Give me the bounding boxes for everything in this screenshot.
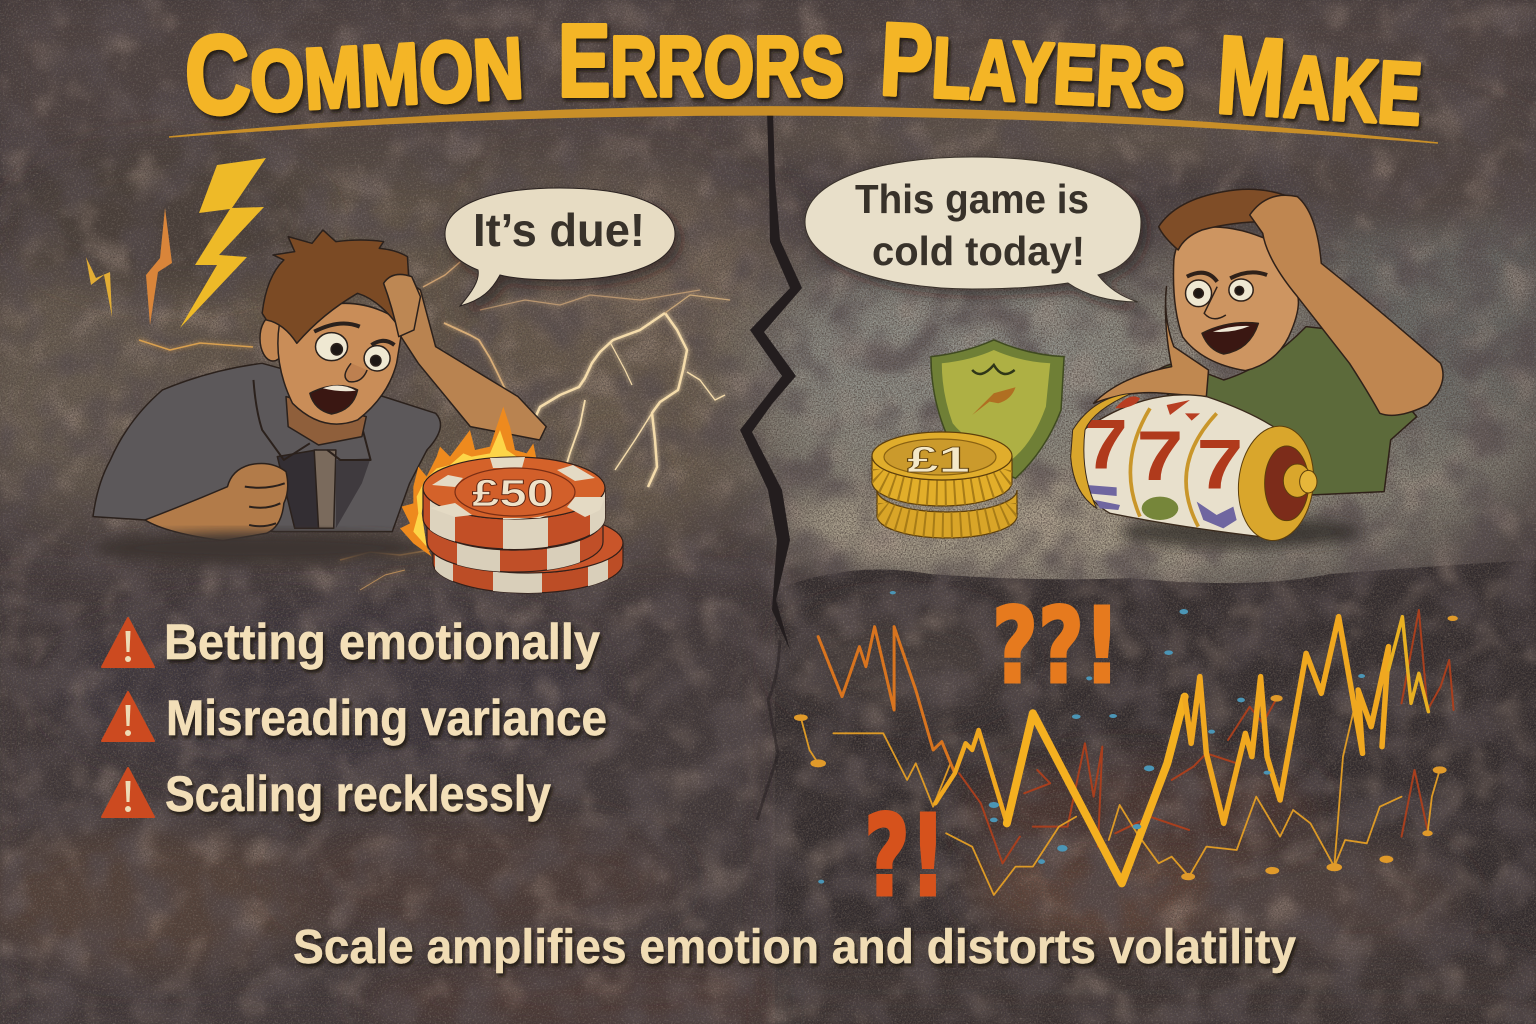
thin yellow lines: [801, 710, 1440, 895]
main yellow line left: [935, 730, 1007, 823]
hair: [1159, 189, 1289, 250]
bubble text line two: cold today!: [872, 228, 1085, 274]
central crack: [740, 110, 802, 650]
speech bubble: cold today: [805, 157, 1141, 302]
main yellow line right: [1185, 617, 1389, 823]
nose: [345, 363, 367, 382]
upper coin: [872, 432, 1012, 506]
raised arm: [384, 272, 546, 440]
inner flame: [413, 430, 517, 547]
reel body: [1073, 395, 1273, 537]
volatility chart: [794, 591, 1458, 895]
warning item three: [102, 766, 551, 822]
green shirt: [1150, 327, 1417, 495]
top chip: [423, 457, 605, 560]
neck: [286, 397, 366, 445]
reel end cap: [1233, 422, 1319, 544]
mouth: [310, 386, 358, 414]
chip value: £50: [472, 473, 554, 515]
reel sevens: [1084, 404, 1243, 503]
coin value: £1: [907, 439, 970, 480]
reel sevens: 7: [1137, 416, 1183, 495]
shield face: [942, 350, 1050, 460]
middle chip: [426, 525, 604, 572]
warning text: Scaling recklessly: [165, 766, 551, 822]
blue sparks: [818, 591, 1365, 884]
speech bubble: its due: [445, 188, 675, 306]
chip stack: [423, 457, 623, 600]
reel gold rings: [1130, 408, 1217, 527]
icon: small yellow bolt: [86, 257, 112, 317]
outer flame: [400, 407, 537, 557]
icon: orange bolt: [146, 208, 172, 325]
warning icon: [102, 768, 154, 817]
bubble text: It’s due!: [473, 204, 645, 256]
bottom caption: Scale amplifies emotion and distorts volatility: [293, 921, 1296, 974]
hair: [262, 230, 410, 343]
left character: [93, 230, 546, 541]
slot reel: [1071, 393, 1319, 544]
left scene lightning crackle: [139, 262, 730, 590]
shirt: [93, 363, 441, 532]
bubble text line one: This game is: [855, 176, 1089, 222]
bottom chip: [432, 524, 624, 594]
reel shadow: [1120, 516, 1360, 548]
orange line: [818, 627, 955, 773]
red background lines: [959, 610, 1454, 863]
warning icon: [102, 692, 154, 741]
title underline: [169, 107, 1438, 143]
warning icon: [102, 618, 154, 667]
raised arm and hand: [1250, 195, 1443, 415]
teeth: [323, 385, 356, 391]
shield squiggle: [972, 365, 1015, 374]
left hand and forearm: [1094, 287, 1209, 403]
reel left gold rim: [1071, 393, 1132, 508]
face: [1173, 227, 1298, 371]
warning item one: [102, 614, 600, 670]
lightning bolts: [86, 158, 266, 328]
face: [278, 303, 403, 424]
ground shadow under left character: [90, 532, 430, 564]
warning text: Misreading variance: [166, 690, 607, 746]
flames: [400, 407, 537, 557]
title word: players: PLAYERS: [878, 1, 1188, 131]
reel sevens: 7: [1197, 424, 1243, 503]
punctuation marks bottom: ?!: [864, 792, 946, 922]
punctuation marks top: ??!: [992, 585, 1120, 707]
warning item two: [102, 690, 607, 746]
shield arrow: [972, 387, 1016, 415]
undershirt and placket: [253, 380, 371, 528]
reel symbols: [1087, 396, 1237, 528]
chart dots: [794, 616, 1458, 880]
chip face wedges: [430, 457, 605, 519]
title: [182, 0, 1426, 148]
tail yellow line: [1389, 617, 1428, 712]
right character: [1094, 189, 1443, 495]
eyes: [1186, 272, 1267, 319]
lower coin: [877, 490, 1017, 538]
mouth: [1202, 323, 1258, 354]
title word: make: MAKE: [1214, 13, 1426, 148]
crack faint extension: [757, 640, 780, 820]
ear: [260, 316, 286, 361]
shield icon: [931, 340, 1064, 478]
title word: errors: ERRORS: [558, 3, 844, 118]
hand on head: [384, 274, 420, 337]
teeth: [1213, 326, 1250, 332]
coin stack: [872, 432, 1017, 538]
warning list: [102, 614, 607, 822]
reel sevens: 7: [1084, 404, 1128, 483]
fist and forearm: [145, 463, 288, 541]
main yellow line centre: [1007, 697, 1185, 883]
eyes: [314, 323, 394, 371]
icon: large yellow bolt: [180, 158, 266, 328]
warning text: Betting emotionally: [164, 614, 600, 670]
title word: common: COMMON: [182, 0, 526, 139]
